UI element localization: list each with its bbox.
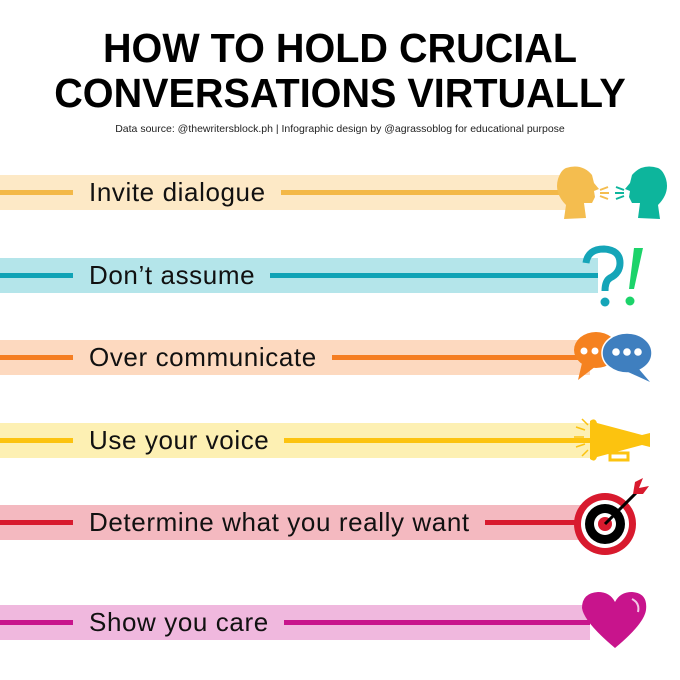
icon: talking heads (557, 166, 667, 219)
row: determine what you really want (0, 505, 580, 540)
icon: heart (582, 592, 646, 648)
row: over communicate: Over communicate (89, 342, 317, 372)
icon: speech bubbles (574, 332, 652, 382)
icon: megaphone (574, 418, 650, 462)
title: CONVERSATIONS VIRTUALLY (54, 70, 626, 116)
row: invite dialogue: Invite dialogue (89, 177, 266, 207)
row: use your voice (0, 423, 590, 458)
icon: target with dart (574, 478, 649, 555)
title: HOW TO HOLD CRUCIAL (103, 25, 577, 71)
icon: question and exclamation (582, 246, 643, 306)
row: invite dialogue (0, 175, 566, 210)
row: don't assume (0, 258, 598, 293)
row: don't assume: Don’t assume (89, 260, 255, 290)
row: show you care (0, 605, 590, 640)
title (54, 25, 626, 116)
row: over communicate (0, 340, 590, 375)
subtitle: data source: Data source: @thewritersblock.ph | Infographic design by @agrassoblog for educational purpose (115, 123, 565, 135)
row: show you care: Show you care (89, 607, 269, 637)
row: use your voice: Use your voice (89, 425, 269, 455)
row: determine what you really want: Determine what you really want (89, 507, 470, 537)
